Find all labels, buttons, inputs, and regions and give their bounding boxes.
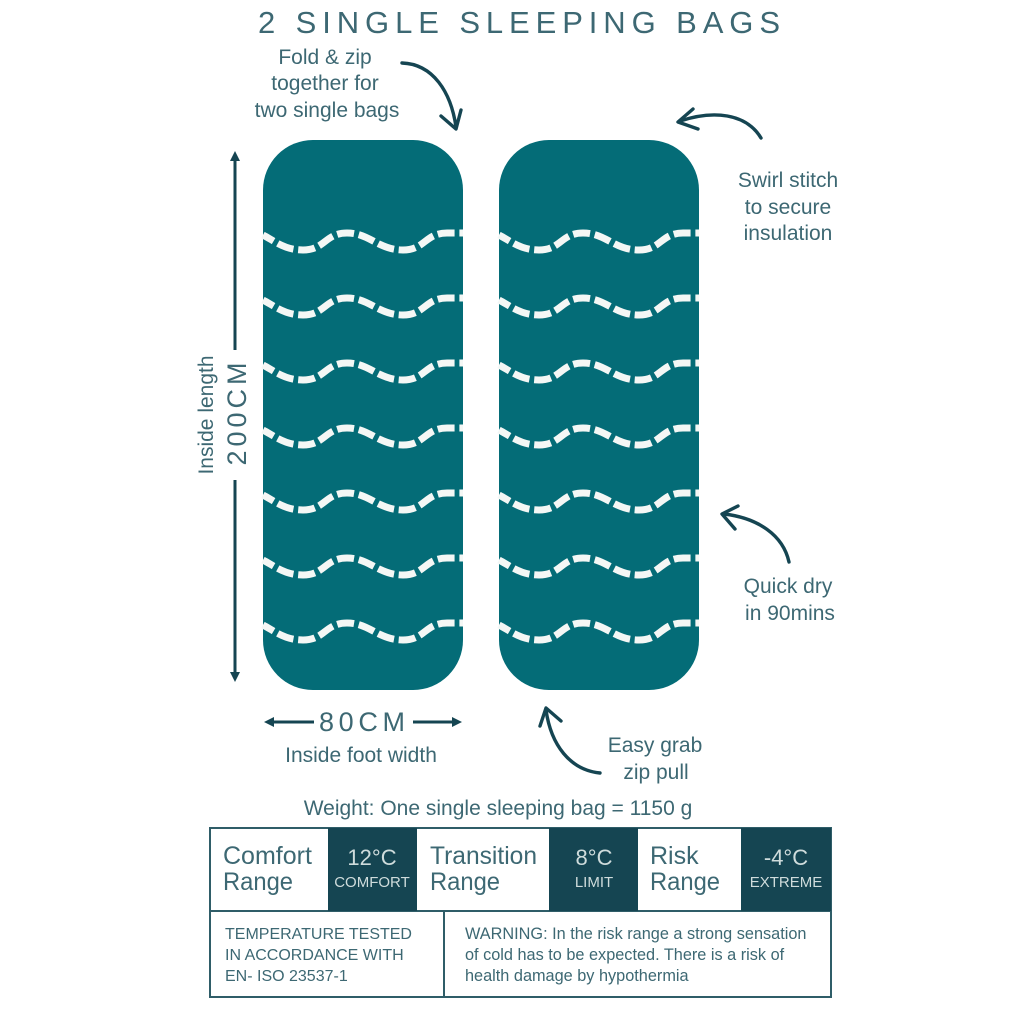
dimension: inside length: 200CM [222,362,252,466]
callout: fold and zip: two single bags [255,99,399,122]
dimension: inside length: Inside length [195,355,218,475]
warning note: health damage by hypothermia [465,967,690,985]
callout: quick dry: in 90mins [745,602,835,625]
transition value [549,828,638,911]
test standard note: EN- ISO 23537-1 [225,968,348,985]
callout: quick dry: Quick dry [744,575,833,598]
arrow: fold and zip [402,63,461,129]
transition value: LIMIT [575,874,613,891]
arrow: swirl stitch [678,109,761,138]
comfort range label: Range [223,868,293,896]
title: 2 SINGLE SLEEPING BAGS [258,5,780,40]
comfort value: 12°C [347,845,397,870]
comfort value [328,828,417,911]
temperature table [210,828,831,997]
callout: swirl stitch: to secure [745,196,831,219]
sleeping bag: right [499,140,699,690]
arrow: zip pull [540,708,600,773]
callout: fold and zip [255,46,461,129]
risk value: -4°C [764,845,808,870]
risk range label: Range [650,868,720,896]
transition range label [430,842,537,896]
dimension: foot width: 80CM [319,707,405,737]
dimension: inside length [195,151,252,682]
warning note: WARNING: In the risk range a strong sensation [465,925,806,943]
arrow: quick dry [722,506,789,562]
sleeping bag: left [263,140,463,690]
dimension: foot width [264,707,462,767]
transition value: 8°C [576,845,613,870]
warning note [465,925,806,985]
comfort range label: Comfort [223,842,312,870]
weight line: Weight: One single sleeping bag = 1150 g [304,797,692,820]
callout: zip pull: Easy grab [608,734,702,757]
dimension: foot width: Inside foot width [285,744,437,767]
risk range label: Risk [650,842,699,870]
callout: swirl stitch [738,169,838,245]
callout: quick dry [744,575,835,625]
comfort value: COMFORT [334,874,410,891]
test standard note [225,926,412,985]
callout: zip pull: zip pull [623,761,689,784]
callout: swirl stitch: Swirl stitch [738,169,838,192]
risk value: EXTREME [750,874,822,891]
callout: fold and zip: together for [271,72,379,95]
test standard note: TEMPERATURE TESTED [225,926,412,943]
risk range label [650,842,720,896]
callout: fold and zip: Fold & zip [278,46,372,69]
transition range label: Range [430,868,500,896]
callout: zip pull [608,734,702,784]
comfort range label [223,842,312,896]
risk value [741,828,831,911]
callout: swirl stitch: insulation [744,222,832,245]
test standard note: IN ACCORDANCE WITH [225,947,404,964]
warning note: of cold has to be expected. There is a risk of [465,946,785,964]
transition range label: Transition [430,842,537,870]
